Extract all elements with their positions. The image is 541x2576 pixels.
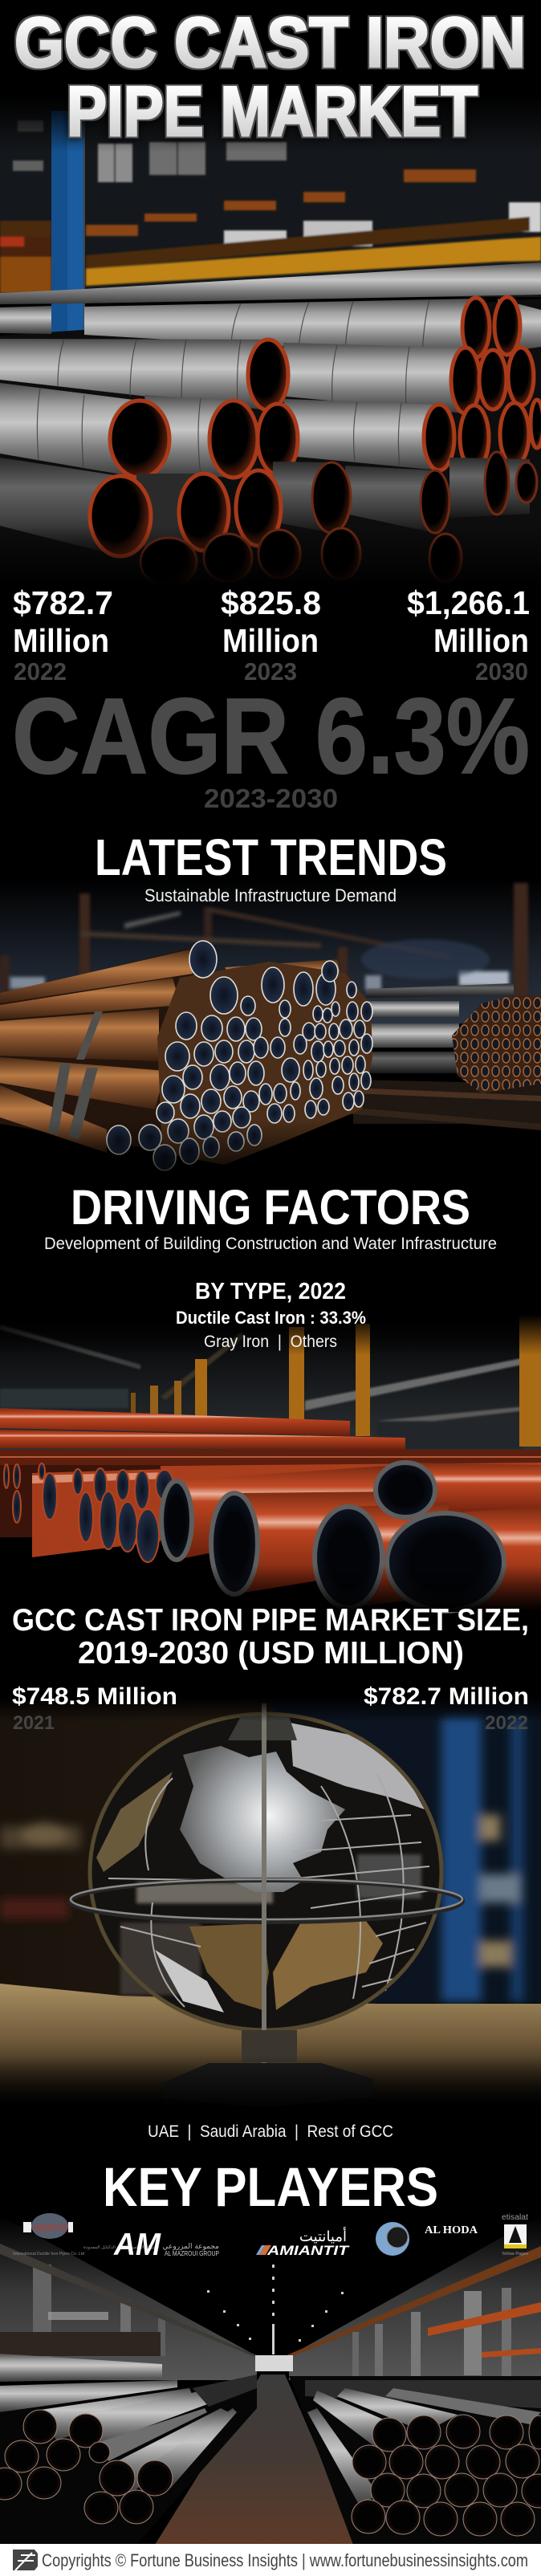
blurred workshop background <box>0 1698 541 2003</box>
logo: Al Hoda wordmark: AL HODA <box>425 2224 478 2236</box>
title line 2: PIPE MARKET <box>67 71 478 151</box>
pipe openings <box>107 941 372 1170</box>
stat: 2022: $782.7 Million <box>364 1683 529 1710</box>
logo: Etisalat Yellow Pages: Yellow Pages <box>502 2252 529 2257</box>
heading: market size: 2019-2030 (USD MILLION) <box>78 1636 464 1671</box>
central floor <box>155 2375 359 2545</box>
stat 2023 <box>221 584 321 686</box>
logo: Amiantit: أميانتيت <box>299 2227 347 2245</box>
logo: Al Mazroui Group <box>113 2228 219 2262</box>
stat 2030: 2030 <box>475 657 528 686</box>
left pipes backdrop <box>0 947 193 1156</box>
stat: 2021: $748.5 Million <box>12 1683 177 1710</box>
hero top fade <box>0 96 541 153</box>
photo bottom fade <box>0 1120 541 1184</box>
stat 2030: Million <box>433 622 529 659</box>
logo: Amiantit <box>256 2227 350 2258</box>
latest trends caption: Sustainable Infrastructure Demand <box>144 885 397 905</box>
panel: latest trends photo of copper pipes <box>0 879 541 1184</box>
small pipe openings <box>4 1463 173 1562</box>
heading: key players: KEY PLAYERS <box>103 2156 438 2218</box>
middle pipes <box>0 339 541 470</box>
stat: 2021 <box>12 1683 177 1734</box>
stat 2023: Million <box>222 622 319 659</box>
rear red pipes <box>0 1408 541 1537</box>
logo: Al Hoda round emblem <box>376 2222 409 2256</box>
factory background <box>0 96 541 297</box>
CAGR period: 2023-2030 <box>204 783 338 813</box>
stat: 2022: 2022 <box>485 1712 528 1734</box>
logo: Etisalat Yellow Pages <box>502 2213 529 2257</box>
stat: 2021: 2021 <box>13 1712 55 1734</box>
logo: Al Mazroui Group: مجموعة المزروعي <box>162 2243 219 2251</box>
stat 2030 <box>407 584 530 686</box>
photo top fade <box>0 1315 541 1355</box>
title <box>14 2 526 151</box>
front red pipe bodies <box>32 1463 541 1611</box>
panel: company logos <box>13 2213 529 2262</box>
warehouse background <box>0 1315 541 1451</box>
panel: market value statistics <box>12 584 530 813</box>
stat: 2022 <box>364 1683 529 1734</box>
heading: market size <box>12 1603 529 1671</box>
leading segment: Ductile Cast Iron : 33.3% <box>176 1308 366 1328</box>
large pipe openings <box>161 1463 504 1611</box>
panel: hero photo of steel pipes in factory <box>0 0 541 602</box>
front bright pipes <box>0 383 298 478</box>
by type block <box>176 1279 366 1351</box>
photo bottom fade <box>0 1565 541 1612</box>
logo: Indipco <box>13 2213 159 2257</box>
panel: driving factors photo of red pipes <box>0 1315 541 1612</box>
stat 2022 <box>13 584 113 686</box>
table <box>0 1984 541 2111</box>
photo bottom fade <box>0 2055 541 2111</box>
stat 2023: $825.8 <box>221 584 321 621</box>
ceiling lights <box>207 2265 344 2354</box>
logo: Etisalat Yellow Pages: etisalat <box>502 2213 528 2222</box>
rear pipes <box>0 262 541 357</box>
factory walls and ceiling <box>0 2216 541 2380</box>
distant small pipe stack <box>452 995 541 1093</box>
globe base <box>162 2030 374 2107</box>
latitude and longitude grid <box>108 1774 431 2007</box>
globe interior reflections <box>120 1854 421 1995</box>
regions list: UAE | Saudi Arabia | Rest of GCC <box>148 2122 393 2141</box>
stat 2022: $782.7 <box>13 584 113 621</box>
background silver pipes <box>337 983 541 1130</box>
logo: Indipco: INDIPCO <box>34 2224 68 2233</box>
other segments: Gray Iron | Others <box>204 1333 337 1351</box>
logo: Indipco: International Ductile Iron Pipes Co. Ltd <box>13 2252 84 2257</box>
warehouse background <box>0 879 541 1023</box>
logo: Al Mazroui Group: AM <box>113 2228 161 2262</box>
panel: footer <box>0 2544 541 2576</box>
stat 2023: 2023 <box>244 657 297 686</box>
stat 2022: 2022 <box>14 657 67 686</box>
outer meridian ring <box>90 1714 441 2030</box>
top cap <box>228 1716 297 1740</box>
photo top fade <box>0 1698 541 1722</box>
panel: metal globe photo <box>0 1698 541 2111</box>
icon: Fortune Business Insights logo <box>13 2550 38 2570</box>
bright end wall <box>255 2355 293 2371</box>
driving factors caption: Development of Building Construction and Water Infrastructure <box>44 1235 497 1253</box>
hero bottom fade <box>0 526 541 586</box>
pipe stack backdrop <box>0 299 541 586</box>
stat 2030: $1,266.1 <box>407 584 530 621</box>
right pipe stack <box>289 2376 541 2545</box>
by type heading: BY TYPE, 2022 <box>195 1279 346 1304</box>
lower dark pipes <box>0 452 537 586</box>
heading: driving factors: DRIVING FACTORS <box>71 1180 470 1235</box>
vertical pole <box>262 1703 266 2065</box>
copper pipe bodies <box>0 950 341 1153</box>
heading: latest trends: LATEST TRENDS <box>95 828 447 886</box>
pipe stack end face <box>157 962 372 1165</box>
left pipe stack <box>0 2354 257 2545</box>
blue column <box>51 111 85 336</box>
continents <box>180 1746 345 1892</box>
stat 2022: Million <box>13 622 109 659</box>
logo: Indipco: الشركة العالمية لأنابيب الدكتايل الممدودة <box>83 2244 159 2250</box>
equatorial ring <box>71 1879 462 1922</box>
logo: Al Mazroui Group: AL MAZROUI GROUP <box>165 2250 219 2257</box>
globe sphere <box>71 1703 462 2065</box>
panel: factory hall photo with pipes <box>0 2216 541 2545</box>
logo: Amiantit: AMIANTIT <box>266 2243 350 2258</box>
footer background <box>0 2544 541 2576</box>
